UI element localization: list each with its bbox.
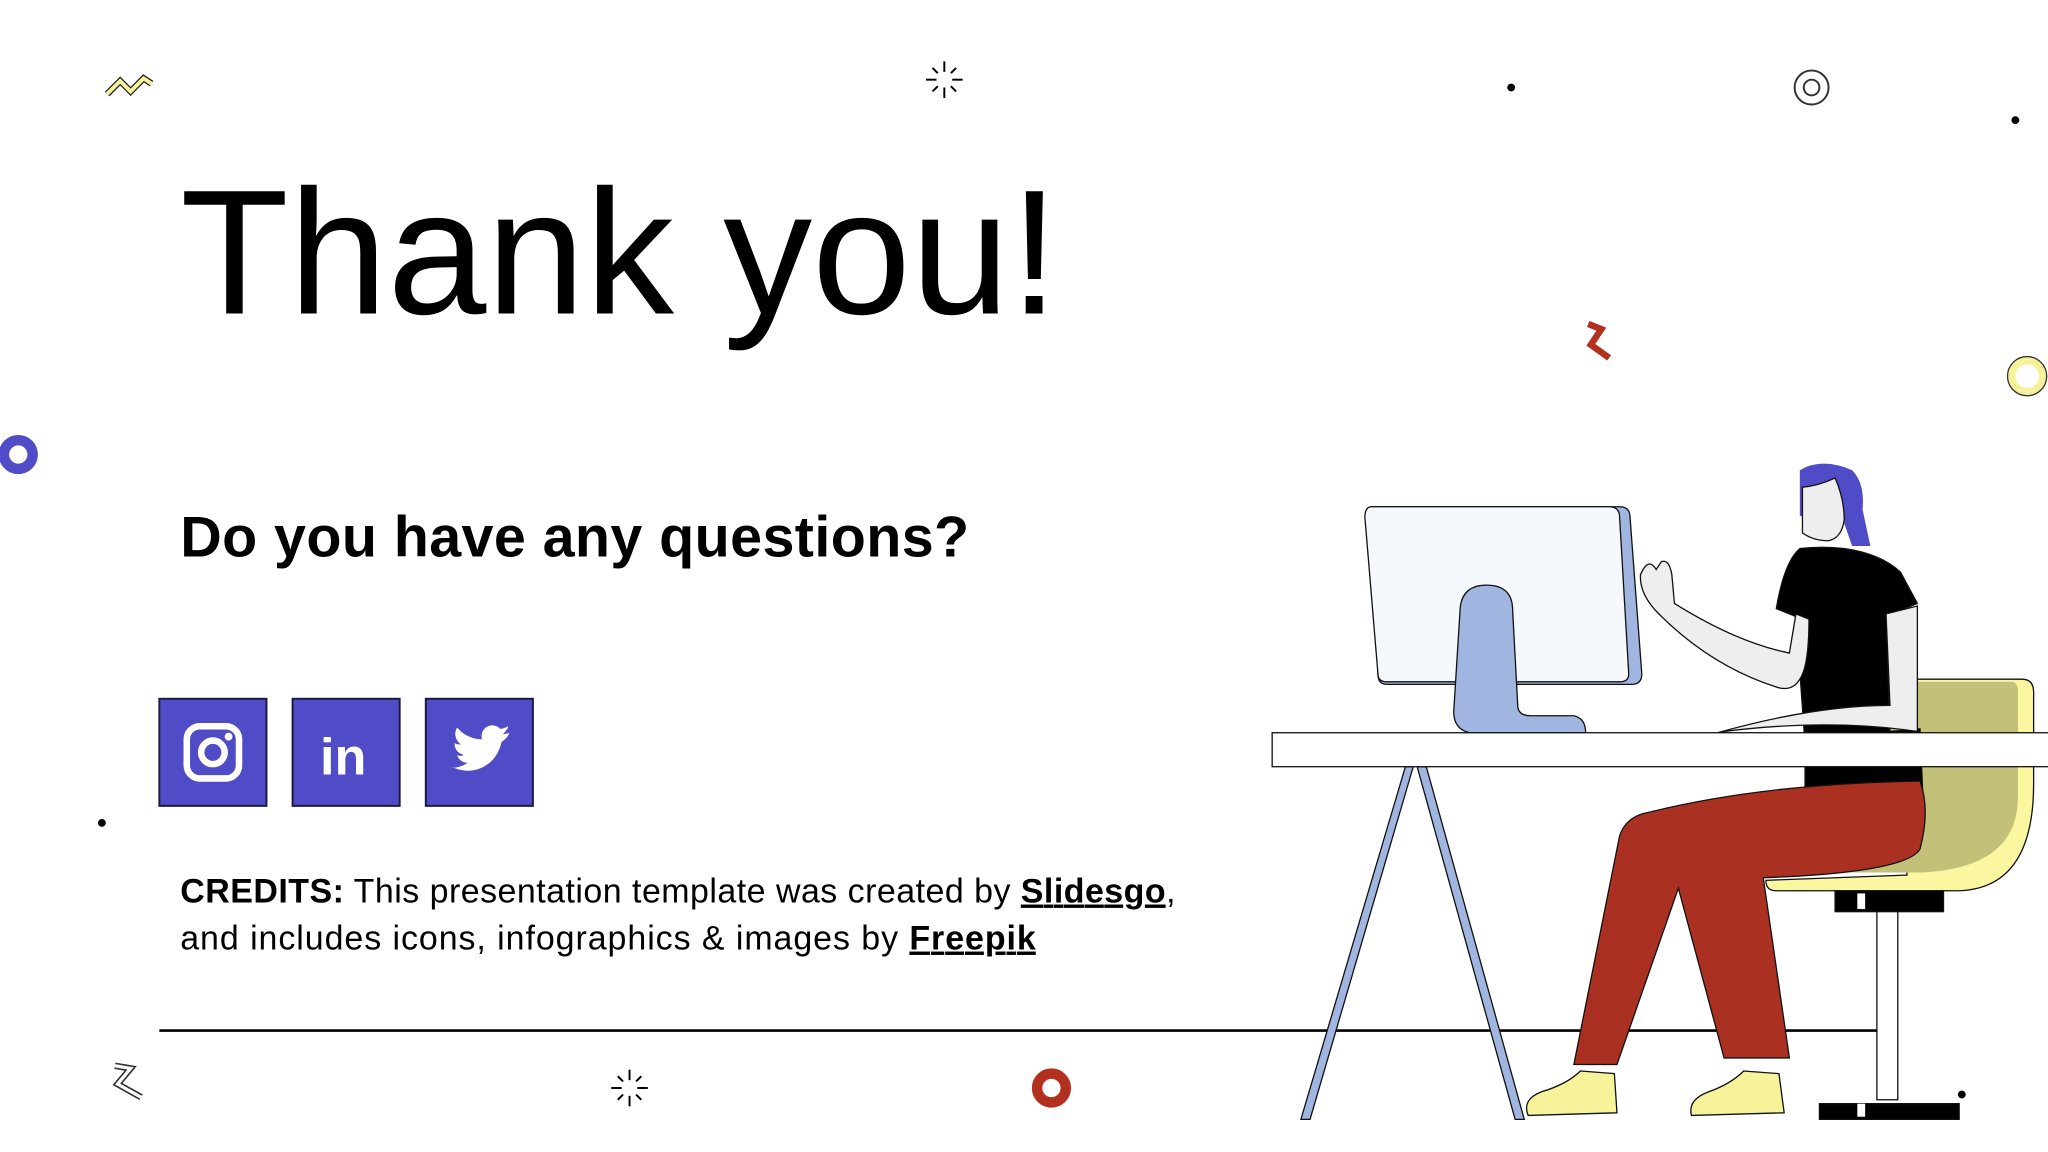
- floor line: [159, 1030, 1881, 1032]
- subtitle: Do you have any questions?: [180, 505, 969, 569]
- title: Thank you!: [180, 152, 1059, 351]
- credits text: [180, 873, 1176, 958]
- icon: instagram: [159, 699, 266, 806]
- credits text: and includes icons, infographics & images by Freepik: [180, 920, 1036, 958]
- face: [1802, 478, 1844, 541]
- social icons: [159, 699, 533, 806]
- monitor: [1371, 507, 1642, 684]
- shirt: [1776, 547, 1923, 790]
- credits text: CREDITS: This presentation template was created by Slidesgo,: [180, 873, 1176, 911]
- icon: twitter: [426, 699, 533, 806]
- arm: [1640, 561, 1809, 689]
- shoes: [1527, 1071, 1617, 1115]
- hair: [1800, 464, 1870, 546]
- pants: [1574, 781, 1925, 1064]
- chair: [1766, 679, 2034, 891]
- illustration: woman at desk: [1272, 464, 2048, 1119]
- desk legs: [1301, 767, 1413, 1119]
- icon: linkedin: in: [320, 729, 366, 787]
- icon: linkedin: [293, 699, 400, 806]
- desk top: [1272, 733, 2048, 767]
